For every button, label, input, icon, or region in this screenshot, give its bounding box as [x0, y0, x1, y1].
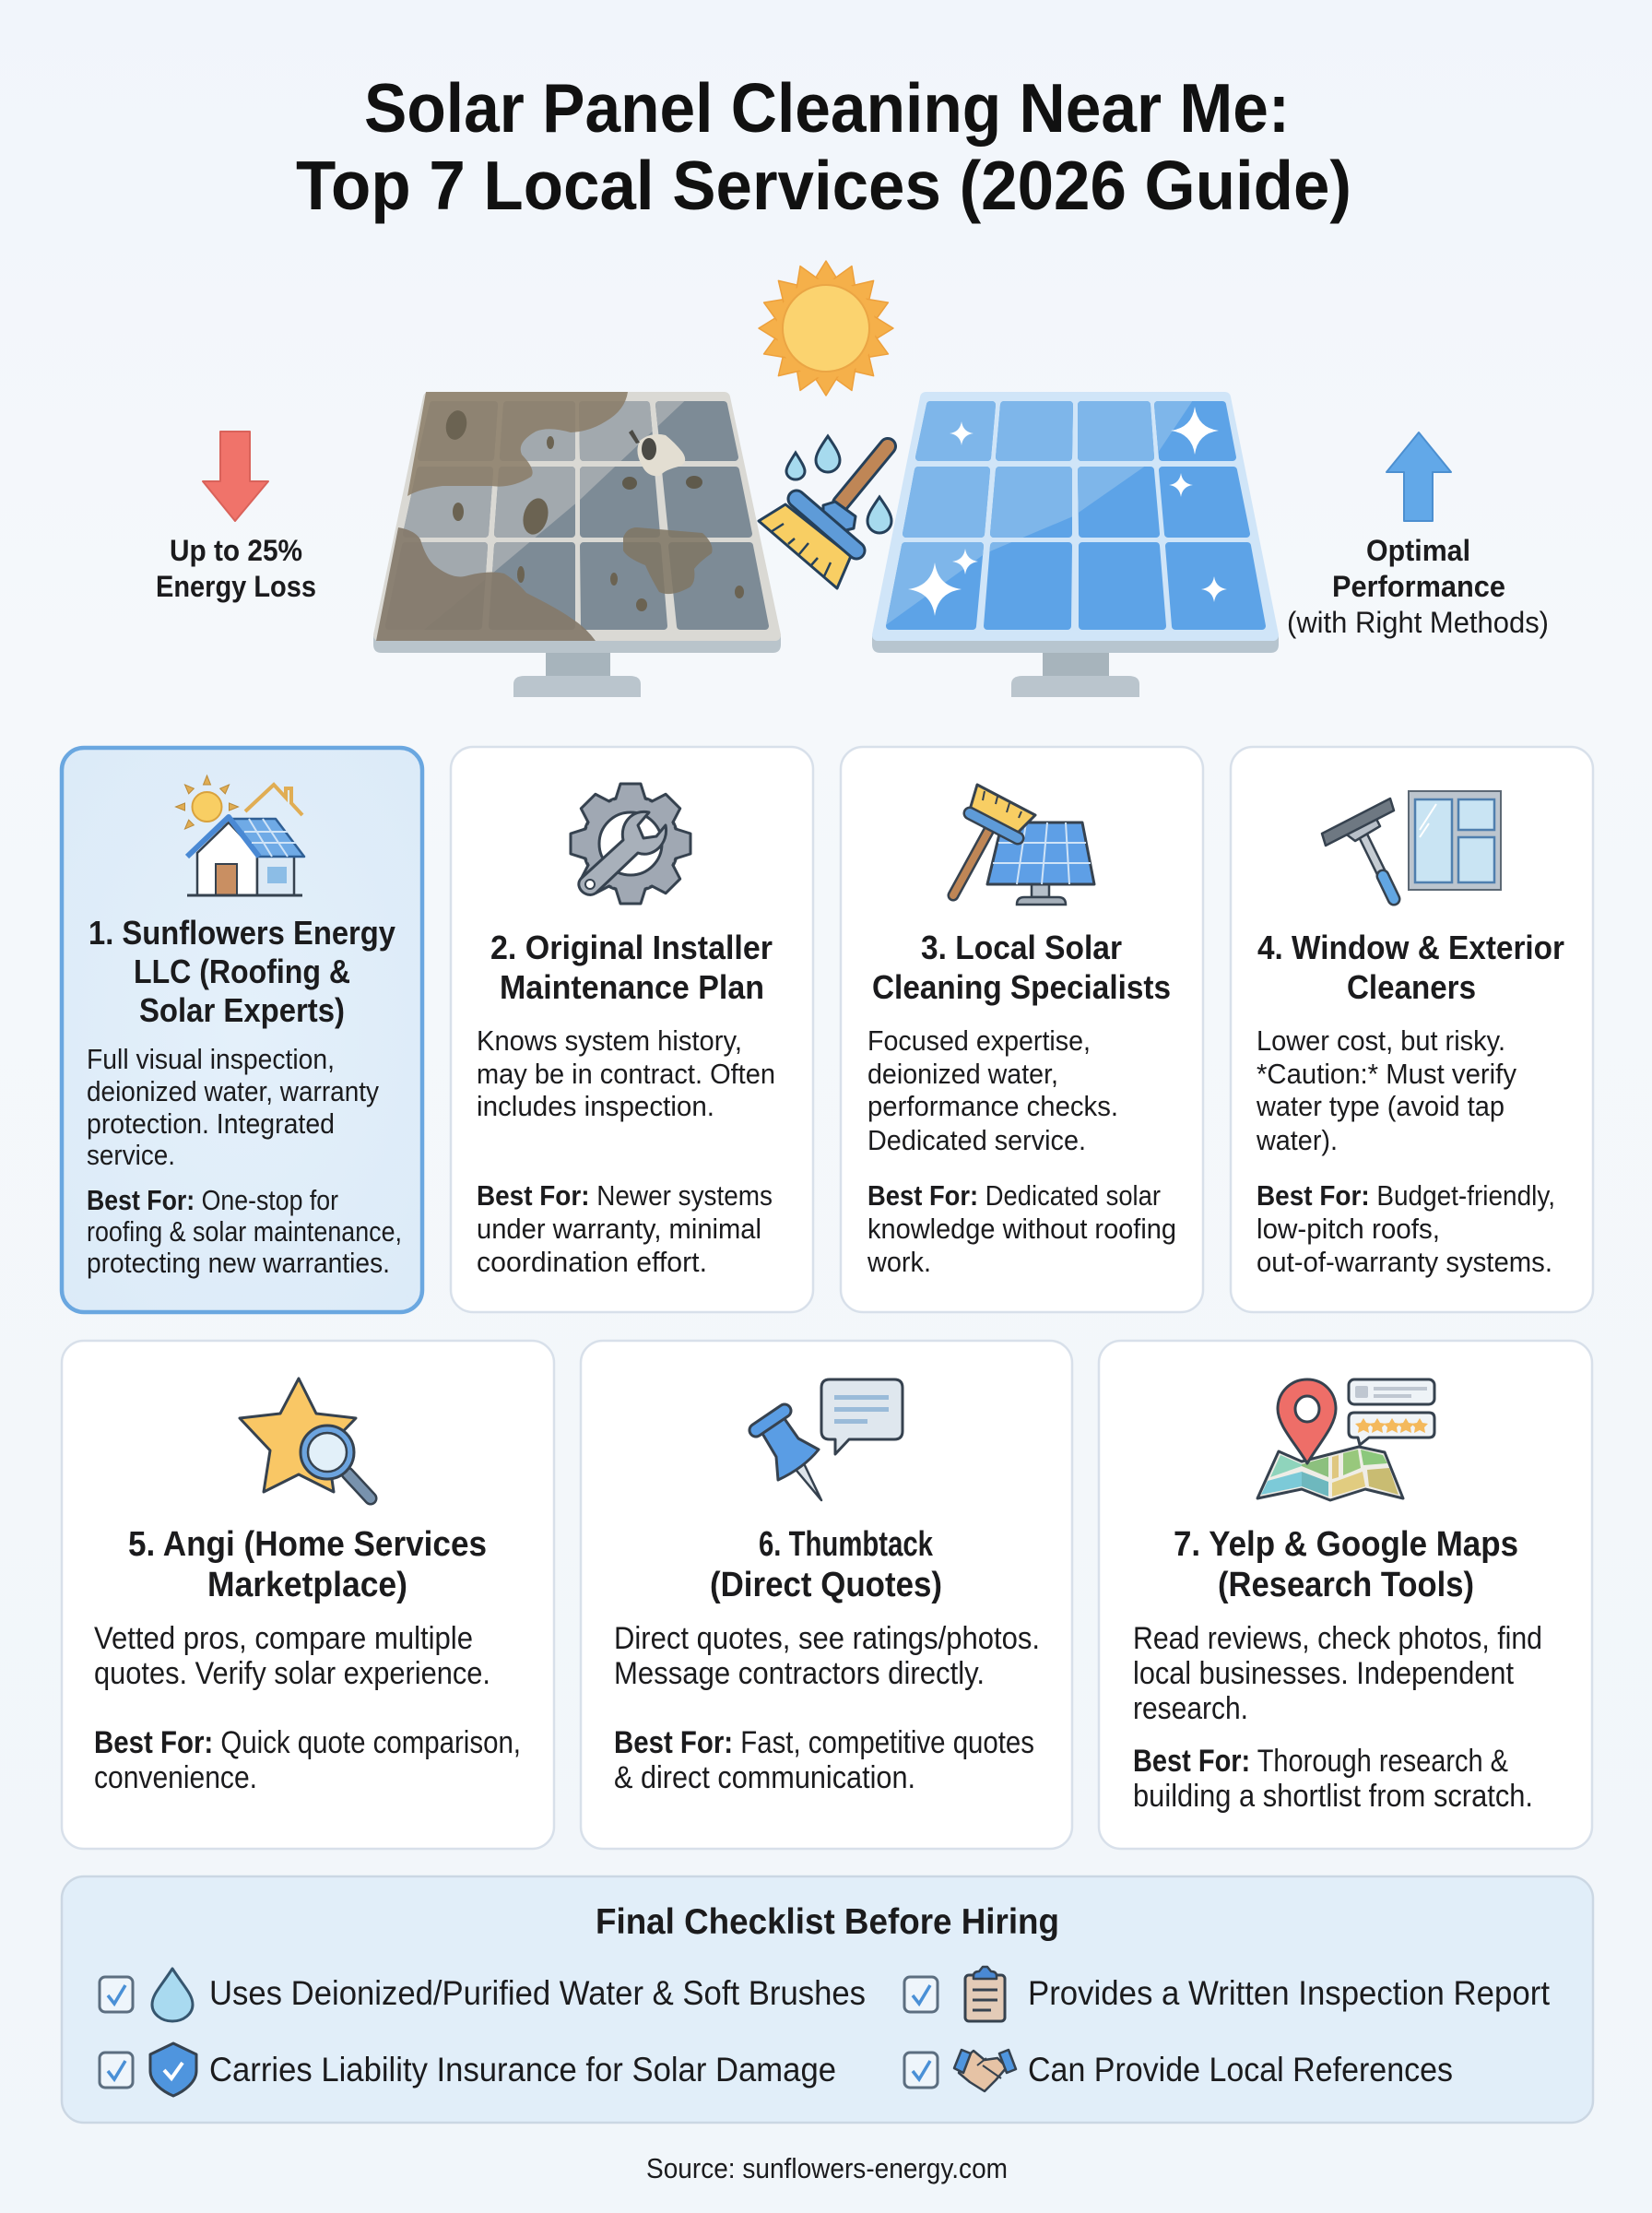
heading: 5. Angi (Home Services: [128, 1525, 487, 1564]
title: Top 7 Local Services (2026 Guide): [296, 147, 1351, 224]
icon: star and magnifier: [240, 1379, 371, 1498]
icon: squeegee and window: [1322, 791, 1501, 899]
description: [87, 1043, 379, 1171]
description: water).: [1256, 1124, 1338, 1156]
icon: red down arrow: [203, 432, 268, 521]
best for: low-pitch roofs,: [1257, 1213, 1440, 1245]
heading: [88, 914, 395, 1029]
clean solar panel: [872, 392, 1279, 697]
description: [1256, 1024, 1516, 1156]
heading: LLC (Roofing &: [134, 953, 350, 990]
panel: card 3 Local Solar Cleaning: [841, 747, 1203, 1312]
best for: out-of-warranty systems.: [1257, 1246, 1552, 1278]
description: Full visual inspection,: [87, 1043, 335, 1075]
best for: Best For: Quick quote comparison,: [94, 1725, 521, 1760]
checklist item: report: Provides a Written Inspection Report: [1028, 1974, 1551, 2012]
checklist item: insurance: [100, 2043, 836, 2096]
description: deionized water, warranty: [87, 1075, 379, 1107]
title: [296, 69, 1351, 224]
optimal performance label: Performance: [1332, 570, 1505, 603]
best for: [87, 1184, 402, 1279]
best for: protecting new warranties.: [87, 1247, 390, 1279]
icon: blue up arrow: [1386, 432, 1451, 521]
energy loss label: Up to 25%: [170, 534, 302, 567]
best for: under warranty, minimal: [477, 1213, 761, 1245]
panel: card 4 Window and Exterior: [1231, 747, 1593, 1312]
heading: Cleaning Specialists: [872, 968, 1171, 1006]
optimal performance label: [1287, 534, 1549, 639]
energy loss label: Energy Loss: [156, 570, 316, 603]
heading: 1. Sunflowers Energy: [88, 914, 395, 952]
checklist item: water: Uses Deionized/Purified Water & Soft Brushes: [209, 1974, 866, 2012]
panel: card 5 Angi: [62, 1341, 554, 1849]
checklist heading: Final Checklist Before Hiring: [596, 1902, 1059, 1942]
heading: 6. Thumbtack: [759, 1525, 934, 1564]
heading: 4. Window & Exterior: [1257, 929, 1564, 966]
best for: Best For: Fast, competitive quotes: [614, 1725, 1034, 1760]
panel: final checklist: [62, 1876, 1593, 2123]
description: deionized water,: [867, 1058, 1058, 1090]
five stars: [1355, 1418, 1428, 1433]
dirty solar panel: [369, 392, 784, 697]
icon: map pin and reviews: [1257, 1379, 1434, 1500]
description: [867, 1024, 1118, 1156]
heading: [1257, 929, 1564, 1006]
source line: Source: sunflowers-energy.com: [646, 2152, 1008, 2184]
best for: [614, 1725, 1034, 1795]
best for: knowledge without roofing: [867, 1213, 1176, 1245]
best for: [1257, 1179, 1555, 1278]
checklist item: report: [904, 1967, 1551, 2021]
best for: [1133, 1744, 1533, 1814]
icon: brush and solar panel: [953, 785, 1094, 905]
description: Message contractors directly.: [614, 1656, 985, 1691]
description: Vetted pros, compare multiple: [94, 1621, 473, 1656]
heading: Solar Experts): [139, 991, 345, 1029]
hero illustration: [156, 261, 1549, 697]
best for: Best For: Newer systems: [477, 1179, 773, 1212]
best for: coordination effort.: [477, 1246, 707, 1278]
description: quotes. Verify solar experience.: [94, 1656, 490, 1691]
best for: [867, 1179, 1176, 1278]
heading: [490, 929, 773, 1006]
best for: work.: [867, 1246, 931, 1278]
description: local businesses. Independent: [1133, 1656, 1514, 1691]
description: includes inspection.: [477, 1090, 714, 1122]
best for: Best For: One-stop for: [87, 1184, 338, 1216]
panel: card 2 Original Installer: [451, 747, 813, 1312]
best for: roofing & solar maintenance,: [87, 1215, 402, 1248]
checklist item: water: [100, 1969, 866, 2021]
heading: Marketplace): [207, 1566, 407, 1604]
best for: convenience.: [94, 1760, 257, 1795]
energy loss label: [156, 534, 316, 603]
sparkles: [908, 407, 1227, 616]
heading: [128, 1525, 487, 1604]
heading: (Direct Quotes): [710, 1566, 942, 1604]
checklist item: insurance: Carries Liability Insurance for Solar Damage: [209, 2051, 836, 2089]
description: Direct quotes, see ratings/photos.: [614, 1621, 1040, 1656]
description: performance checks.: [867, 1090, 1118, 1122]
checklist item: references: Can Provide Local References: [1028, 2051, 1453, 2089]
optimal performance label: (with Right Methods): [1287, 606, 1549, 639]
description: [94, 1621, 490, 1691]
best for: & direct communication.: [614, 1760, 915, 1795]
checklist item: references: [904, 2050, 1453, 2091]
bird dropping: [637, 434, 685, 476]
icon: pushpin and speech bubble: [756, 1379, 903, 1500]
description: Lower cost, but risky.: [1257, 1024, 1505, 1057]
description: *Caution:* Must verify: [1257, 1058, 1516, 1090]
heading: Maintenance Plan: [500, 968, 764, 1006]
heading: 2. Original Installer: [490, 929, 773, 966]
description: service.: [87, 1139, 175, 1171]
description: water type (avoid tap: [1256, 1090, 1504, 1122]
description: Knows system history,: [477, 1024, 742, 1057]
best for: building a shortlist from scratch.: [1133, 1779, 1533, 1814]
heading: (Research Tools): [1218, 1566, 1474, 1604]
icon: gear and wrench: [571, 784, 690, 904]
heading: [872, 929, 1171, 1006]
description: [477, 1024, 775, 1122]
best for: Best For: Budget-friendly,: [1257, 1179, 1555, 1212]
description: Read reviews, check photos, find: [1133, 1621, 1542, 1656]
optimal performance label: Optimal: [1366, 534, 1470, 567]
icon: sun: [759, 261, 893, 396]
best for: [94, 1725, 521, 1795]
heading: [710, 1525, 942, 1604]
best for: Best For: Thorough research &: [1133, 1744, 1508, 1779]
icon: house with solar roof: [175, 775, 304, 895]
description: may be in contract. Often: [477, 1058, 775, 1090]
description: [1133, 1621, 1542, 1726]
panel: card 1 Sunflowers Energy: [62, 748, 422, 1312]
description: Focused expertise,: [867, 1024, 1091, 1057]
description: protection. Integrated: [87, 1107, 335, 1140]
panel: card 7 Yelp and Google Maps: [1099, 1341, 1592, 1849]
heading: [1174, 1525, 1518, 1604]
heading: Cleaners: [1347, 968, 1476, 1006]
description: Dedicated service.: [867, 1124, 1086, 1156]
title: Solar Panel Cleaning Near Me:: [364, 69, 1290, 147]
best for: [477, 1179, 773, 1278]
heading: 7. Yelp & Google Maps: [1174, 1525, 1518, 1564]
description: [614, 1621, 1040, 1691]
best for: Best For: Dedicated solar: [867, 1179, 1161, 1212]
icon: water drops and broom: [759, 436, 891, 588]
panel: card 6 Thumbtack: [581, 1341, 1072, 1849]
heading: 3. Local Solar: [921, 929, 1122, 966]
description: research.: [1133, 1691, 1248, 1726]
